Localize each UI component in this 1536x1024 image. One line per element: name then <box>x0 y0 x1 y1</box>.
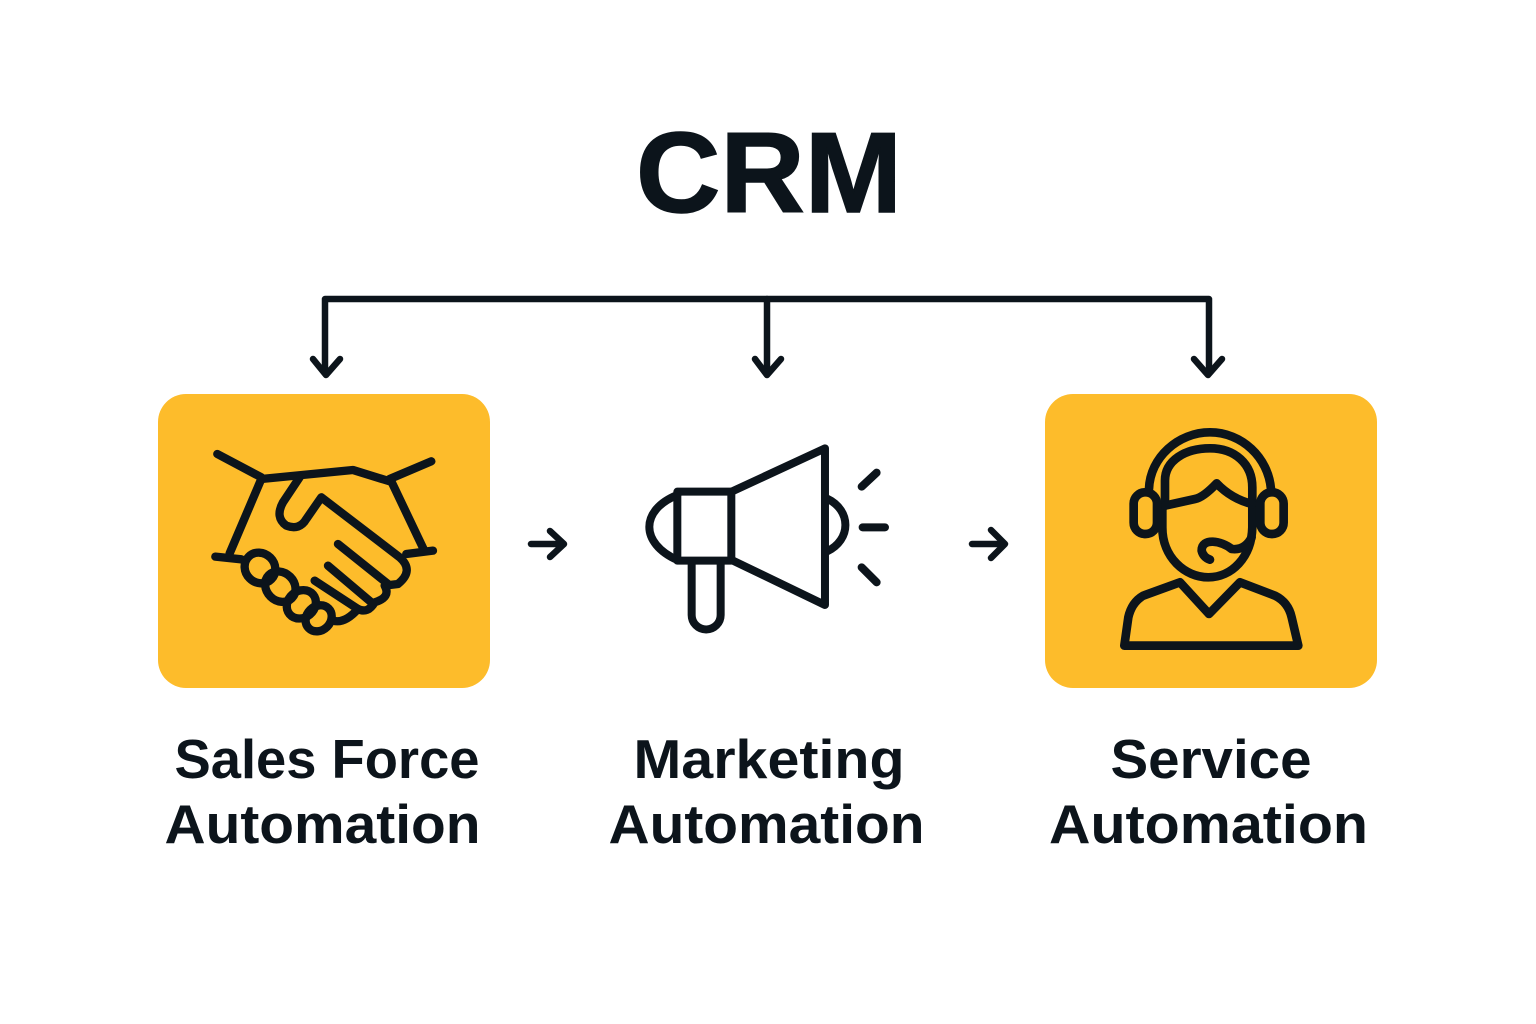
label: marketing automation <box>608 728 924 855</box>
connector arrows from CRM to three branches <box>313 299 1222 375</box>
title: CRM <box>636 110 902 237</box>
label: sales force automation <box>164 728 480 855</box>
label: service automation: Service <box>1110 728 1312 790</box>
small arrow: marketing to service <box>972 530 1005 558</box>
label: marketing automation: Automation <box>608 793 924 855</box>
panel: service icon tile <box>1045 394 1377 688</box>
label: service automation: Automation <box>1049 793 1368 855</box>
label: service automation <box>1049 728 1368 855</box>
label: marketing automation: Marketing <box>634 728 904 790</box>
icon: support agent with headset <box>1124 432 1298 646</box>
small arrow: sales to marketing <box>531 531 564 557</box>
icon: megaphone <box>649 448 885 629</box>
label: sales force automation: Automation <box>164 793 480 855</box>
icon: handshake <box>215 454 433 637</box>
panel: sales force icon tile <box>158 394 490 688</box>
label: sales force automation: Sales Force <box>174 728 480 790</box>
